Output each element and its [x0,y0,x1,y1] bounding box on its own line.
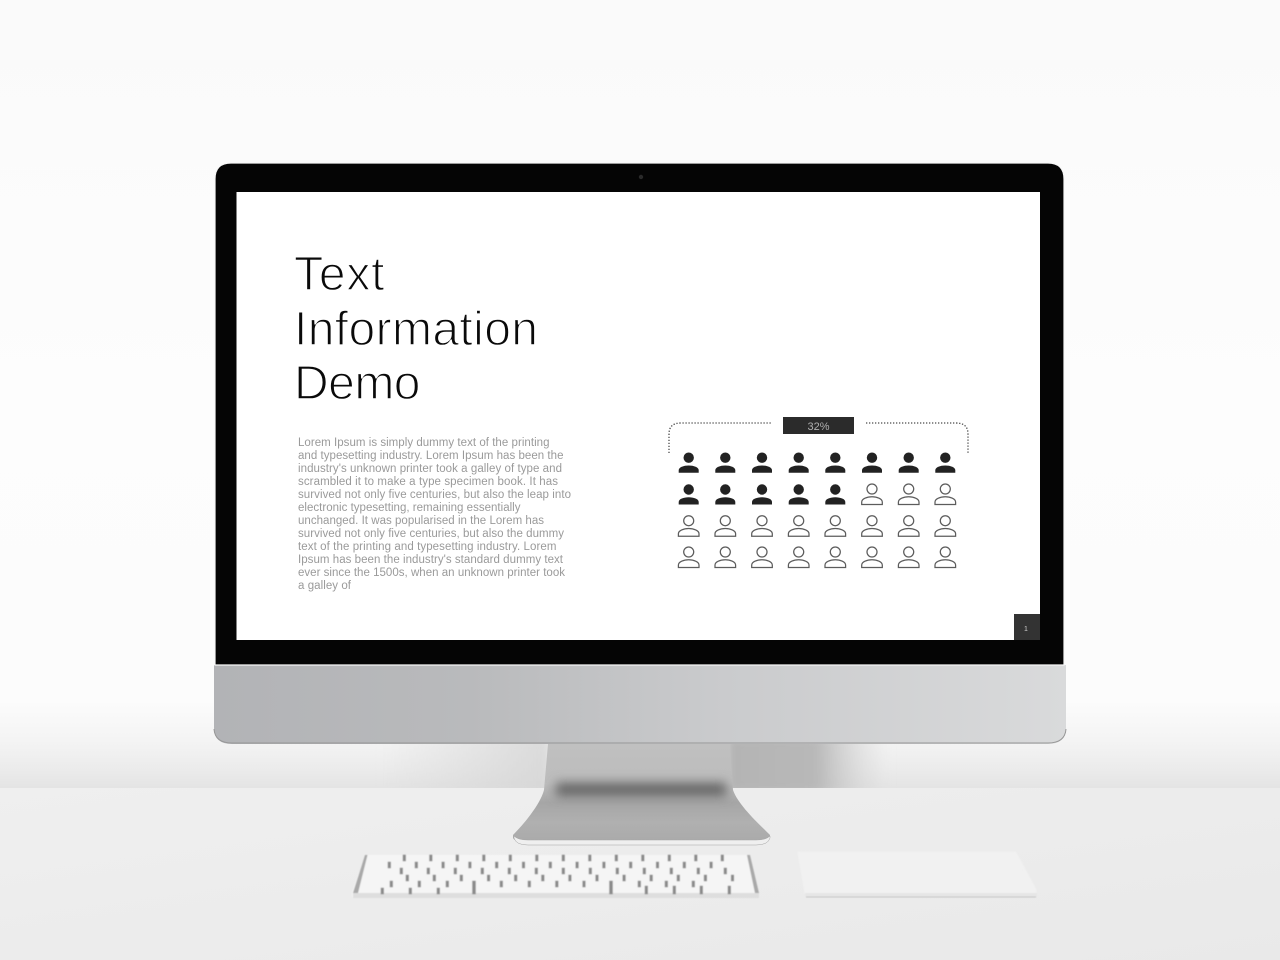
body text: scrambled it to make a type specimen book. It has [298,476,558,488]
body text: survived not only five centuries, but also the leap into [298,489,571,501]
body text: Lorem Ipsum is simply dummy text of the printing [298,437,550,449]
body text: a galley of [298,580,352,592]
keyboard edges [353,855,368,893]
title: Text [294,248,384,301]
percentage label: 32% [807,421,830,433]
page number badge [1014,614,1040,640]
title [294,248,538,410]
keyboard [352,855,759,898]
body text: electronic typesetting, remaining essentially [298,502,521,514]
pictogram: 13 of 32 people filled [678,452,956,568]
monitor stand [513,744,770,845]
body text: survived not only five centuries, but also the dummy [298,528,564,540]
dotted bracket [669,423,968,453]
page number badge: 1 [1024,626,1028,633]
monitor bezel [215,163,1064,665]
body text [298,437,571,592]
body text: ever since the 1500s, when an unknown printer took [298,567,565,579]
monitor chin [214,665,1066,744]
title: Information [294,303,538,356]
camera [639,175,643,179]
keyboard body [352,855,759,898]
monitor [214,163,1066,744]
body text: Ipsum has been the industry's standard dummy text [298,554,564,566]
percentage label [783,417,854,434]
desk surface [0,788,1280,960]
body text: text of the printing and typesetting industry. Lorem [298,541,556,553]
body text: industry's unknown printer took a galley of type and [298,463,562,475]
title: Demo [294,357,420,410]
screen [236,192,1040,640]
key gaps [381,855,734,894]
stand shadow on wall [438,744,872,788]
body text: and typesetting industry. Lorem Ipsum has been the [298,450,564,462]
body text: unchanged. It was popularised in the Lorem has [298,515,544,527]
trackpad [799,853,1037,897]
